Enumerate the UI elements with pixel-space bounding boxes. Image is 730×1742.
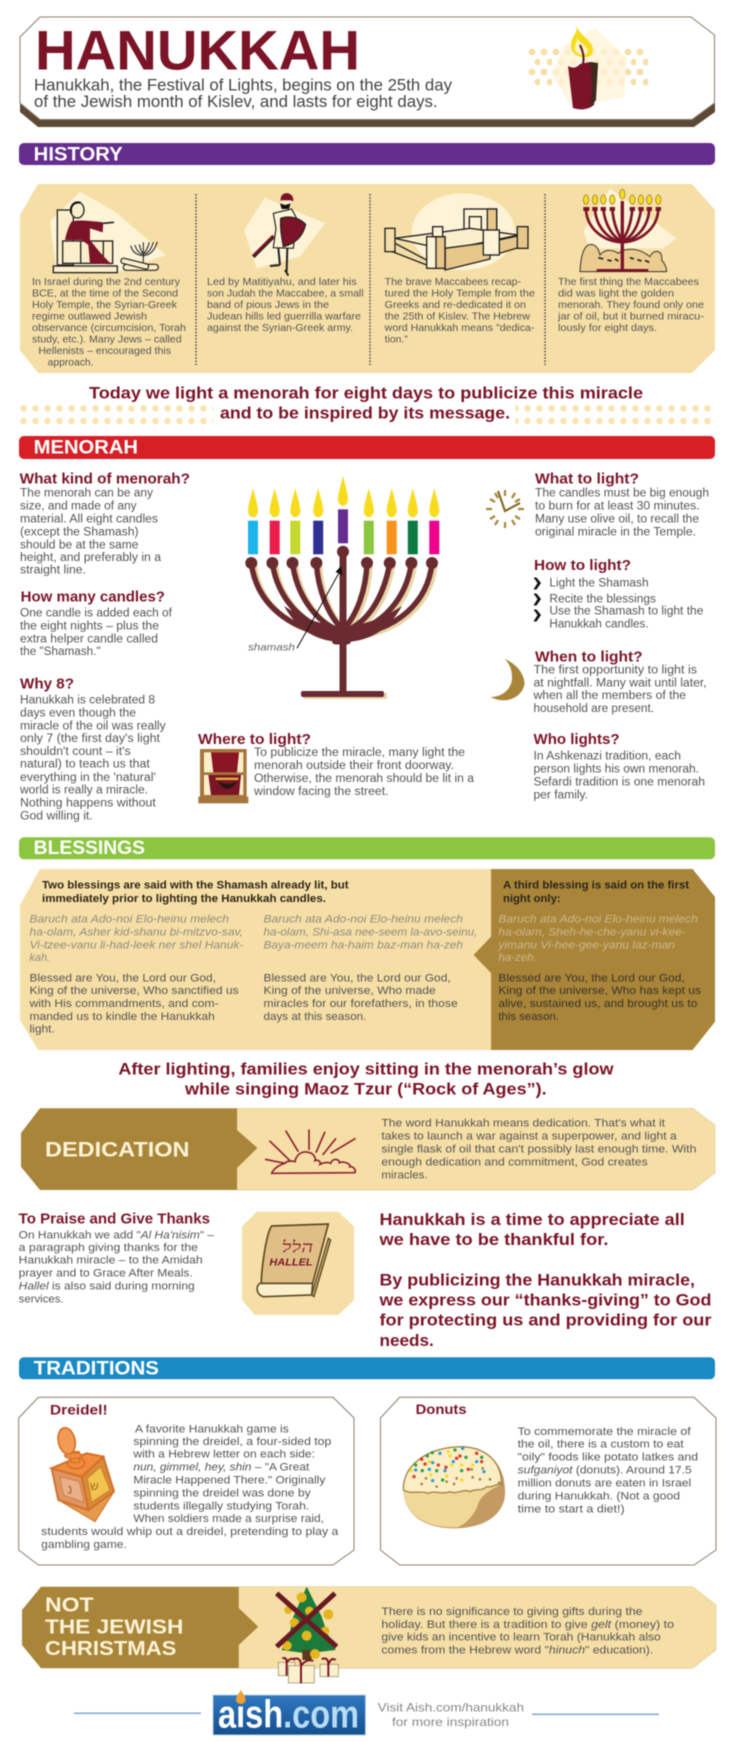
text block: how to light: How to light?: [534, 558, 631, 574]
text: dreidel body: gambling game.: [41, 1539, 127, 1551]
statement: time to appreciate: [378, 1211, 712, 1350]
text: donuts body: during Hanukkah. (Not a good: [518, 1490, 680, 1502]
blessing one: light.: [30, 1024, 55, 1036]
icon: crescent moon: [490, 659, 525, 700]
panel: not the jewish christmas: [22, 1587, 716, 1683]
text: christmas body: comes from the Hebrew word " hinuch " education).: [381, 1645, 653, 1657]
flames: [248, 476, 439, 517]
text block: how many candles: [20, 590, 173, 658]
text: dedication body: [381, 1118, 696, 1181]
header panel: [20, 17, 715, 127]
text block: to praise and give thanks: services.: [19, 1294, 64, 1306]
text block: to praise and give thanks: a paragraph giving thanks for the: [19, 1242, 198, 1254]
text: dreidel body: spinning the dreidel was done by: [133, 1487, 311, 1499]
text block: who lights: [534, 732, 705, 802]
text block: who lights: In Ashkenazi tradition, each: [534, 751, 681, 763]
text: history column 1: BCE, at the time of the Second: [32, 289, 178, 300]
statement: time to appreciate: By publicizing the Hanukkah miracle,: [380, 1272, 695, 1290]
text: dedication body: enough dedication and commitment, God creates: [381, 1156, 648, 1168]
icon: holy temple: [385, 193, 528, 270]
menorah shadow: [254, 565, 435, 699]
statement: after lighting: [118, 1060, 614, 1098]
icon: Maccabee soldier: [244, 193, 325, 276]
blessing one: ha-olam, Asher kid-shanu bi-mitzvo-sav,: [30, 926, 243, 938]
text: history column 3: tion.": [385, 334, 408, 345]
blessing two: Blessed are You, the Lord our God,: [264, 972, 451, 984]
blessing two: days at this season.: [264, 1011, 366, 1023]
text block: what kind of menorah: [20, 471, 190, 577]
text block: what kind of menorah: (except the Shamash): [20, 526, 139, 538]
text block: why 8: days even though the: [20, 707, 136, 719]
text block: what to light: to burn for at least 30 minutes.: [535, 500, 700, 512]
section bar: history: HISTORY: [34, 145, 123, 166]
statement: after lighting: After lighting, families enjoy sitting in the menorah’s glow: [118, 1060, 614, 1078]
text block: who lights: Who lights?: [534, 732, 620, 748]
text block: why 8: miracle of the oil was really: [20, 720, 166, 732]
text block: why 8: shouldn't count – it's: [20, 746, 131, 758]
text: history column 3: tured the Holy Temple from the: [385, 289, 535, 300]
statement: today we light: [20, 384, 714, 425]
statement: time to appreciate: we express our “thanks-giving” to God: [378, 1292, 711, 1310]
intro: two blessings: [42, 880, 349, 905]
text block: who lights: Sefardi tradition is one menorah: [534, 777, 705, 789]
text: history column 2: band of pious Jews in the: [207, 300, 329, 311]
text: dreidel body: students would whip out a dreidel, pretending to play a: [41, 1526, 339, 1538]
text block: who lights: person lights his own menorah.: [534, 764, 699, 776]
blessing three: [497, 914, 702, 1023]
title: HANUKKAH: [35, 18, 360, 82]
text block: why 8: Hanukkah is celebrated 8: [20, 694, 155, 706]
text: history column 3: Greeks and re-dedicated it on: [385, 300, 526, 311]
text: history column 1: [32, 277, 186, 368]
text: dedication body: takes to launch a war against a superpower, and light a: [381, 1131, 678, 1143]
text: christmas body: holiday. But there is a tradition to give gelt (money) to: [381, 1619, 674, 1631]
icon: clock: [486, 490, 524, 528]
logo: aish.com: aish.com: [218, 1694, 359, 1736]
text: dreidel body: Miracle Happened There." Originally: [133, 1474, 326, 1486]
blessing one: [28, 914, 244, 1036]
arrow: shamash: shamash: [248, 642, 295, 654]
text block: when to light: at nightfall. Many wait until later,: [534, 677, 707, 689]
text: history column 1: Hellenists – encouraged this: [38, 346, 171, 357]
statement: today we light: and to be inspired by its message.: [220, 404, 510, 422]
panel: dreidel: Dreidel!: [50, 1402, 108, 1418]
panel: donuts: [380, 1397, 716, 1565]
text block: why 8: Why 8?: [20, 676, 74, 692]
text block: how many candles: the "Shamash.": [20, 646, 101, 658]
text: dreidel body: students illegally studying Torah.: [133, 1500, 309, 1512]
text: dedication body: single flask of oil that can't possibly last enough time. With: [381, 1143, 696, 1155]
blessing two: [264, 914, 477, 1023]
section bar: traditions: TRADITIONS: [34, 1359, 159, 1380]
blessing two: King of the universe, Who made: [264, 985, 436, 997]
text: history column 3: word Hanukkah means "dedica-: [384, 323, 534, 334]
text: history column 2: Judean hills led guerrilla warfare: [207, 311, 361, 322]
text block: where to light: window facing the street.: [253, 786, 388, 798]
text block: what to light: Many use olive oil, to recall the: [535, 513, 699, 525]
intro text: [34, 77, 453, 111]
text: history column 4: [557, 277, 704, 334]
text block: why 8: everything in the 'natural': [20, 772, 156, 784]
blessing two: Baruch ata Ado-noi Elo-heinu melech: [264, 914, 463, 926]
text: donuts body: sufganiyot (donuts). Around 17.5: [518, 1464, 692, 1476]
footer text: [378, 1701, 524, 1729]
text block: when to light: household are present.: [534, 703, 654, 715]
intro: two blessings: Two blessings are said with the Shamash already lit, but: [42, 880, 349, 892]
text block: how to light: Recite the blessings: [549, 593, 656, 605]
icon: dreidel: ש: [90, 1479, 99, 1493]
icon: candle: [528, 25, 648, 109]
section bar: blessings: BLESSINGS: [34, 838, 145, 859]
panel: blessings: [20, 869, 715, 1050]
icon: golden menorah with people: [580, 188, 677, 272]
section bar: blessings: [19, 837, 715, 859]
text: dreidel body: A favorite Hanukkah game is: [135, 1423, 289, 1435]
text block: to praise and give thanks: Hanukkah miracle – to the Amidah: [19, 1255, 203, 1267]
arrow: shamash: [248, 566, 342, 654]
panel: dedication: DEDICATION: [45, 1139, 190, 1162]
text block: how to light: Light the Shamash: [549, 578, 649, 590]
icon: window with menorah: [198, 749, 248, 803]
text block: why 8: Nothing happens without: [20, 798, 157, 810]
text block: to praise and give thanks: prayer and to Grace After Meals.: [19, 1267, 193, 1279]
blessing three: ha-zeh.: [498, 952, 537, 964]
text: history column 1: study, etc.). Many Jews – called: [32, 334, 182, 345]
text: dreidel body: with a Hebrew letter on each side:: [132, 1449, 315, 1461]
panel: donuts: Donuts: [416, 1401, 467, 1417]
icon: donut: [403, 1447, 505, 1528]
text block: when to light: when all the members of the: [532, 690, 686, 702]
section bar: menorah: [19, 436, 715, 459]
text block: how to light: Hanukkah candles.: [549, 618, 649, 630]
text block: how many candles: How many candles?: [21, 590, 165, 606]
text: history column 4: The first thing the Maccabees: [558, 277, 699, 288]
text block: to praise and give thanks: To Praise and Give Thanks: [19, 1211, 210, 1227]
statement: today we light: Today we light a menorah for eight days to publicize this miracle: [89, 384, 643, 402]
text: christmas body: [381, 1606, 674, 1657]
text block: when to light: The first opportunity to light is: [534, 664, 697, 676]
text block: how to light: [534, 558, 703, 630]
text block: how many candles: One candle is added each of: [20, 607, 173, 619]
text block: when to light: [490, 649, 707, 715]
text block: what to light: original miracle in the Temple.: [535, 526, 696, 538]
text: history column 2: against the Syrian-Greek army.: [207, 323, 353, 334]
intro: two blessings: immediately prior to lighting the Hanukkah candles.: [42, 893, 326, 905]
intro: third blessing: [503, 880, 689, 905]
text: history column 4: menorah. They found only one: [558, 300, 704, 311]
text: history column 2: Led by Matitiyahu, and later his: [207, 277, 357, 288]
text: christmas body: give kids an incentive to learn Torah (Hanukkah also: [381, 1632, 661, 1644]
text block: where to light: To publicize the miracle, many light the: [254, 747, 465, 759]
chart: big menorah: [245, 476, 439, 699]
text: history column 1: Holy Temple, the Syrian-Greek: [32, 300, 178, 311]
menorah body: [245, 546, 438, 697]
text block: why 8: world is really a miracle.: [19, 785, 148, 797]
blessing two: Baya-meem ha-haim baz-man ha-zeh: [264, 939, 463, 951]
text block: what to light: The candles must be big enough: [535, 488, 709, 500]
footer text: Visit Aish.com/hanukkah: [378, 1701, 524, 1715]
statement: time to appreciate: for protecting us and providing for our: [380, 1312, 712, 1330]
text block: to praise and give thanks: On Hanukkah we add " Al Ha'nisim " –: [19, 1229, 215, 1241]
text: donuts body: "oily" foods like potato latkes and: [518, 1451, 698, 1463]
text block: what kind of menorah: should be at the same: [20, 539, 138, 551]
blessing one: Blessed are You, the Lord our God,: [30, 972, 216, 984]
text: history column 3: The brave Maccabees recap-: [385, 277, 521, 288]
candles: [248, 509, 439, 554]
text: donuts body: million donuts are eaten in Israel: [518, 1477, 691, 1489]
heading: not the jewish christmas: NOT: [45, 1595, 94, 1617]
text: history column 1: approach.: [48, 357, 94, 368]
section bar: traditions: [19, 1357, 715, 1380]
statement: time to appreciate: we have to be thankful for.: [378, 1231, 608, 1249]
heading: not the jewish christmas: CHRISTMAS: [45, 1638, 176, 1660]
icon: hallel book: [242, 1212, 354, 1315]
text block: to praise and give thanks: Hallel is also said during morning: [19, 1281, 195, 1293]
text: history column 2: son Judah the Maccabee, a small: [207, 289, 364, 300]
blessing three: ha-olam, Sheh-he-che-yanu vi-kee-: [498, 926, 686, 938]
text block: what kind of menorah: material. All eight candles: [20, 513, 158, 525]
text: dreidel body: nun, gimmel, hey, shin – "A Great: [133, 1462, 309, 1474]
blessing two: ha-olam, Shi-asa nee-seem la-avo-seinu,: [264, 926, 477, 938]
footer text: for more inspiration: [392, 1715, 509, 1729]
text block: where to light: menorah outside their front doorway.: [254, 760, 454, 772]
statement: time to appreciate: Hanukkah is a time to appreciate all: [380, 1211, 685, 1229]
blessing one: kah.: [30, 952, 50, 964]
text: donuts body: To commemorate the miracle of: [518, 1426, 692, 1438]
blessing one: King of the universe, Who sanctified us: [30, 985, 239, 997]
footer: [74, 1690, 659, 1736]
text block: why 8: natural) to teach us that: [20, 759, 151, 771]
statement: time to appreciate: needs.: [380, 1332, 434, 1350]
panel: history: [20, 184, 715, 373]
text block: how to light: Use the Shamash to light the: [549, 606, 703, 618]
text block: to praise and give thanks: [19, 1211, 215, 1306]
text block: what kind of menorah: What kind of menorah?: [20, 471, 190, 487]
text block: where to light: [198, 732, 475, 803]
icon: sun and cloud: [265, 1129, 356, 1173]
text: history column 4: lously for eight days.: [558, 323, 657, 334]
text: donuts body: [518, 1426, 698, 1515]
blessing three: alive, sustained us, and brought us to: [498, 998, 697, 1010]
blessing three: Baruch ata Ado-noi Elo-heinu melech: [498, 914, 698, 926]
text: dreidel body: [41, 1423, 339, 1551]
text: dreidel body: spinning the dreidel, a four-sided top: [133, 1436, 331, 1448]
text block: where to light: Where to light?: [198, 732, 311, 748]
heading: not the jewish christmas: [45, 1595, 183, 1660]
text: donuts body: the oil, there is a custom to eat: [518, 1439, 684, 1451]
text block: how many candles: extra helper candle called: [20, 633, 158, 645]
blessing one: Baruch ata Ado-noi Elo-heinu melech: [30, 914, 229, 926]
text: christmas body: There is no significance to giving gifts during the: [381, 1606, 642, 1618]
blessing one: Vi-tzee-vanu li-had-leek ner shel Hanuk-: [30, 939, 244, 951]
blessing three: King of the universe, Who has kept us: [498, 985, 702, 997]
text: donuts body: time to start a diet!): [518, 1503, 625, 1515]
text block: what to light: [486, 471, 709, 538]
text block: why 8: God willing it.: [20, 810, 93, 822]
text: history column 3: [384, 277, 535, 345]
text: dreidel body: When soldiers made a surprise raid,: [133, 1513, 324, 1525]
text: history column 2: [207, 277, 364, 334]
blessing one: manded us to kindle the Hanukkah: [30, 1011, 215, 1023]
intro text: of the Jewish month of Kislev, and lasts for eight days.: [34, 93, 438, 111]
section bar: history: [19, 143, 715, 166]
text block: where to light: Otherwise, the menorah should be lit in a: [254, 773, 475, 785]
text block: who lights: per family.: [534, 790, 588, 802]
intro: third blessing: A third blessing is said on the first: [503, 880, 689, 892]
text block: what kind of menorah: The menorah can be any: [20, 488, 153, 500]
icon: seated Greek ruler: [50, 192, 166, 273]
text: history column 1: In Israel during the 2nd century: [32, 277, 181, 288]
text: history column 3: the 25th of Kislev. The Hebrew: [385, 311, 531, 322]
section bar: menorah: MENORAH: [34, 437, 138, 458]
icon: hallel book: הלל: [282, 1239, 313, 1257]
intro: third blessing: night only:: [503, 893, 561, 905]
icon: dreidel: נ: [67, 1482, 72, 1496]
icon: crossed-out tree with gifts: [277, 1587, 338, 1683]
statement: after lighting: while singing Maoz Tzur (“Rock of Ages”).: [184, 1080, 547, 1098]
text: history column 4: jar of oil, but it burned miracu-: [557, 311, 704, 322]
text block: what to light: What to light?: [535, 471, 639, 487]
text block: why 8: only 7 (the first day's light: [20, 733, 161, 745]
icon: hallel book: HALLEL: [269, 1257, 313, 1268]
icon: dreidel: [52, 1426, 114, 1522]
text block: what kind of menorah: size, and made of any: [20, 500, 137, 512]
panel: dreidel: [19, 1397, 354, 1565]
text block: what kind of menorah: height, and preferably in a: [20, 552, 162, 564]
text: history column 1: observance (circumcision, Torah: [32, 323, 186, 334]
blessing one: with His commandments, and com-: [28, 998, 219, 1010]
blessing three: Blessed are You, the Lord our God,: [498, 972, 685, 984]
text block: when to light: When to light?: [535, 649, 643, 665]
blessing two: miracles for our forefathers, in those: [264, 998, 458, 1010]
intro text: Hanukkah, the Festival of Lights, begins on the 25th day: [34, 77, 453, 95]
blessing three: yimanu Vi-hee-gee-yanu laz-man: [497, 939, 675, 951]
text block: what kind of menorah: straight line.: [20, 565, 86, 577]
text: history column 1: regime outlawed Jewish: [32, 311, 147, 322]
text: dedication body: miracles.: [381, 1169, 428, 1181]
icon: chevrons: [534, 578, 541, 622]
heading: not the jewish christmas: THE JEWISH: [45, 1616, 183, 1638]
text: dedication body: The word Hanukkah means dedication. That's what it: [381, 1118, 665, 1130]
blessing three: this season.: [498, 1011, 559, 1023]
text: history column 4: did was light the golden: [558, 289, 674, 300]
text block: how many candles: the eight nights – plus the: [20, 620, 159, 632]
panel: dedication: [21, 1108, 715, 1190]
text block: why 8: [19, 676, 166, 822]
